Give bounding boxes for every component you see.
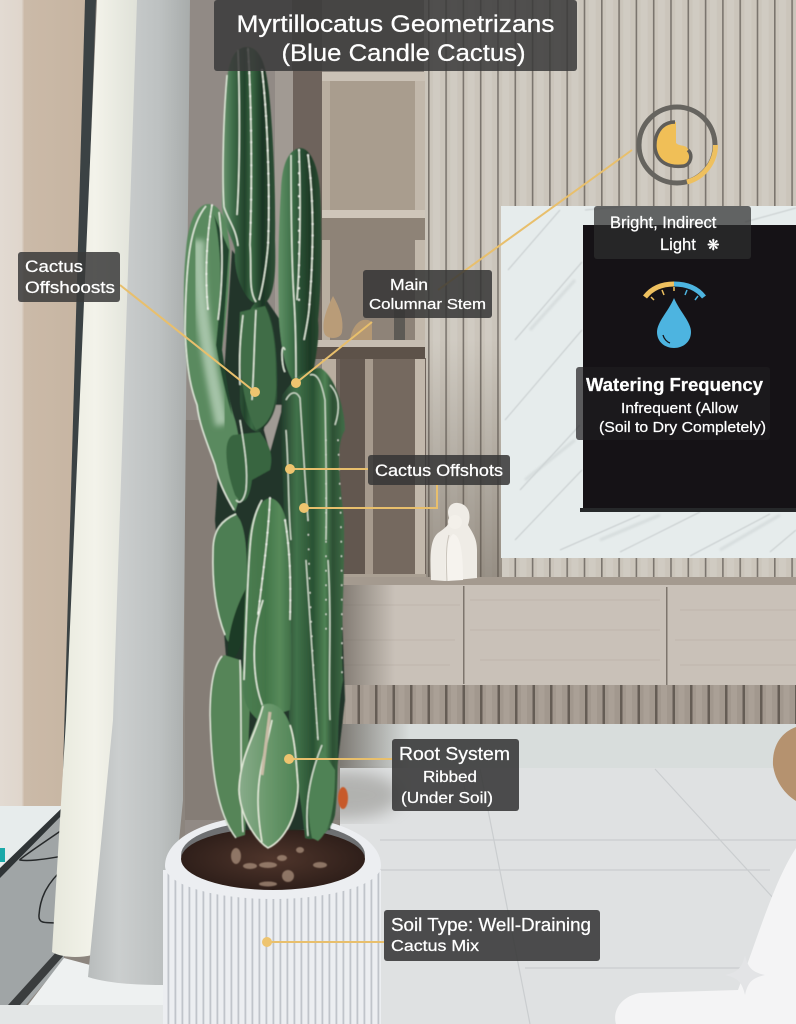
icon: watering gauge and drop	[645, 284, 704, 348]
stem: front lower lobe	[239, 704, 298, 848]
water drop	[657, 298, 691, 348]
callout: root system	[392, 739, 519, 811]
leader lines and anchor dots	[120, 150, 632, 947]
lower slats	[340, 685, 796, 726]
callout: main columnar stem	[363, 270, 492, 318]
blanket	[615, 848, 796, 1024]
window frame	[62, 0, 96, 806]
callout: cactus offshots: Cactus Offshots	[375, 462, 503, 480]
soil	[181, 828, 365, 890]
floating cabinet	[335, 577, 796, 685]
spines	[308, 440, 342, 740]
shaded lower slats	[424, 340, 502, 585]
stem: right clustered column	[280, 368, 345, 841]
callout: bright indirect light	[594, 206, 751, 259]
callout: watering frequency: Infrequent (Allow	[621, 401, 739, 417]
woven basket	[773, 727, 796, 801]
title	[214, 0, 577, 71]
planter pot	[163, 815, 381, 1024]
callout: watering frequency: Watering Frequency	[586, 374, 764, 395]
slatted wall middle	[424, 205, 502, 585]
slatted wall	[424, 0, 796, 210]
callout: bright indirect light: ❋	[707, 237, 720, 254]
stem: left column	[184, 204, 248, 512]
pot rim	[165, 815, 381, 899]
window sill and outside floor	[0, 806, 64, 930]
stem: tall central column	[222, 47, 277, 432]
callout: soil type: Cactus Mix	[391, 938, 479, 955]
callout: cactus offshots	[368, 455, 510, 485]
callout: watering frequency: (Soil to Dry Completely)	[599, 420, 766, 436]
window wood panel	[0, 0, 90, 806]
callout: root system: Root System	[399, 744, 510, 764]
callout: soil type: Soil Type: Well-Draining	[391, 915, 591, 935]
cactus plant	[184, 47, 348, 848]
callout: bright indirect light: Light	[660, 236, 696, 254]
curtain: grey	[88, 0, 190, 985]
stem: middle segment	[226, 420, 271, 502]
callout: main columnar stem: Columnar Stem	[369, 296, 486, 313]
shelf unit	[312, 72, 426, 583]
sculpture	[431, 503, 477, 581]
title: (Blue Candle Cactus)	[282, 40, 526, 67]
callout: cactus offshoosts: Offshoosts	[25, 279, 115, 297]
callout: watering frequency	[576, 367, 770, 440]
stem: second column	[278, 148, 321, 385]
icon: sun light dial	[639, 107, 716, 183]
shaded mass behind stems	[215, 250, 345, 830]
stem: front column	[243, 498, 291, 720]
callout: soil type	[384, 910, 600, 961]
callout: cactus offshoosts	[18, 252, 120, 302]
title: Myrtillocatus Geometrizans	[236, 11, 554, 38]
pale wall gap	[264, 405, 283, 452]
orange flower bud	[338, 787, 348, 809]
wall behind cactus	[185, 0, 295, 1024]
callout: main columnar stem: Main	[390, 277, 428, 294]
stem: left lower segment	[213, 514, 248, 659]
stem: bottom left segment	[210, 655, 250, 838]
callout: bright indirect light: Bright, Indirect	[610, 214, 717, 232]
slatted strip below marble	[500, 556, 796, 586]
cables	[20, 830, 64, 923]
skirting	[340, 724, 796, 769]
pot body	[163, 870, 381, 1024]
television	[580, 225, 796, 512]
tiled floor	[290, 768, 796, 1024]
curtain: cream	[52, 0, 138, 957]
cactus spines	[206, 50, 313, 620]
callout: root system: (Under Soil)	[401, 790, 493, 807]
skirting shade near cactus	[340, 724, 410, 769]
vases on shelf	[323, 296, 343, 338]
callout: root system: Ribbed	[423, 769, 477, 786]
marble panel	[501, 206, 796, 558]
callout: cactus offshoosts: Cactus	[25, 258, 83, 276]
